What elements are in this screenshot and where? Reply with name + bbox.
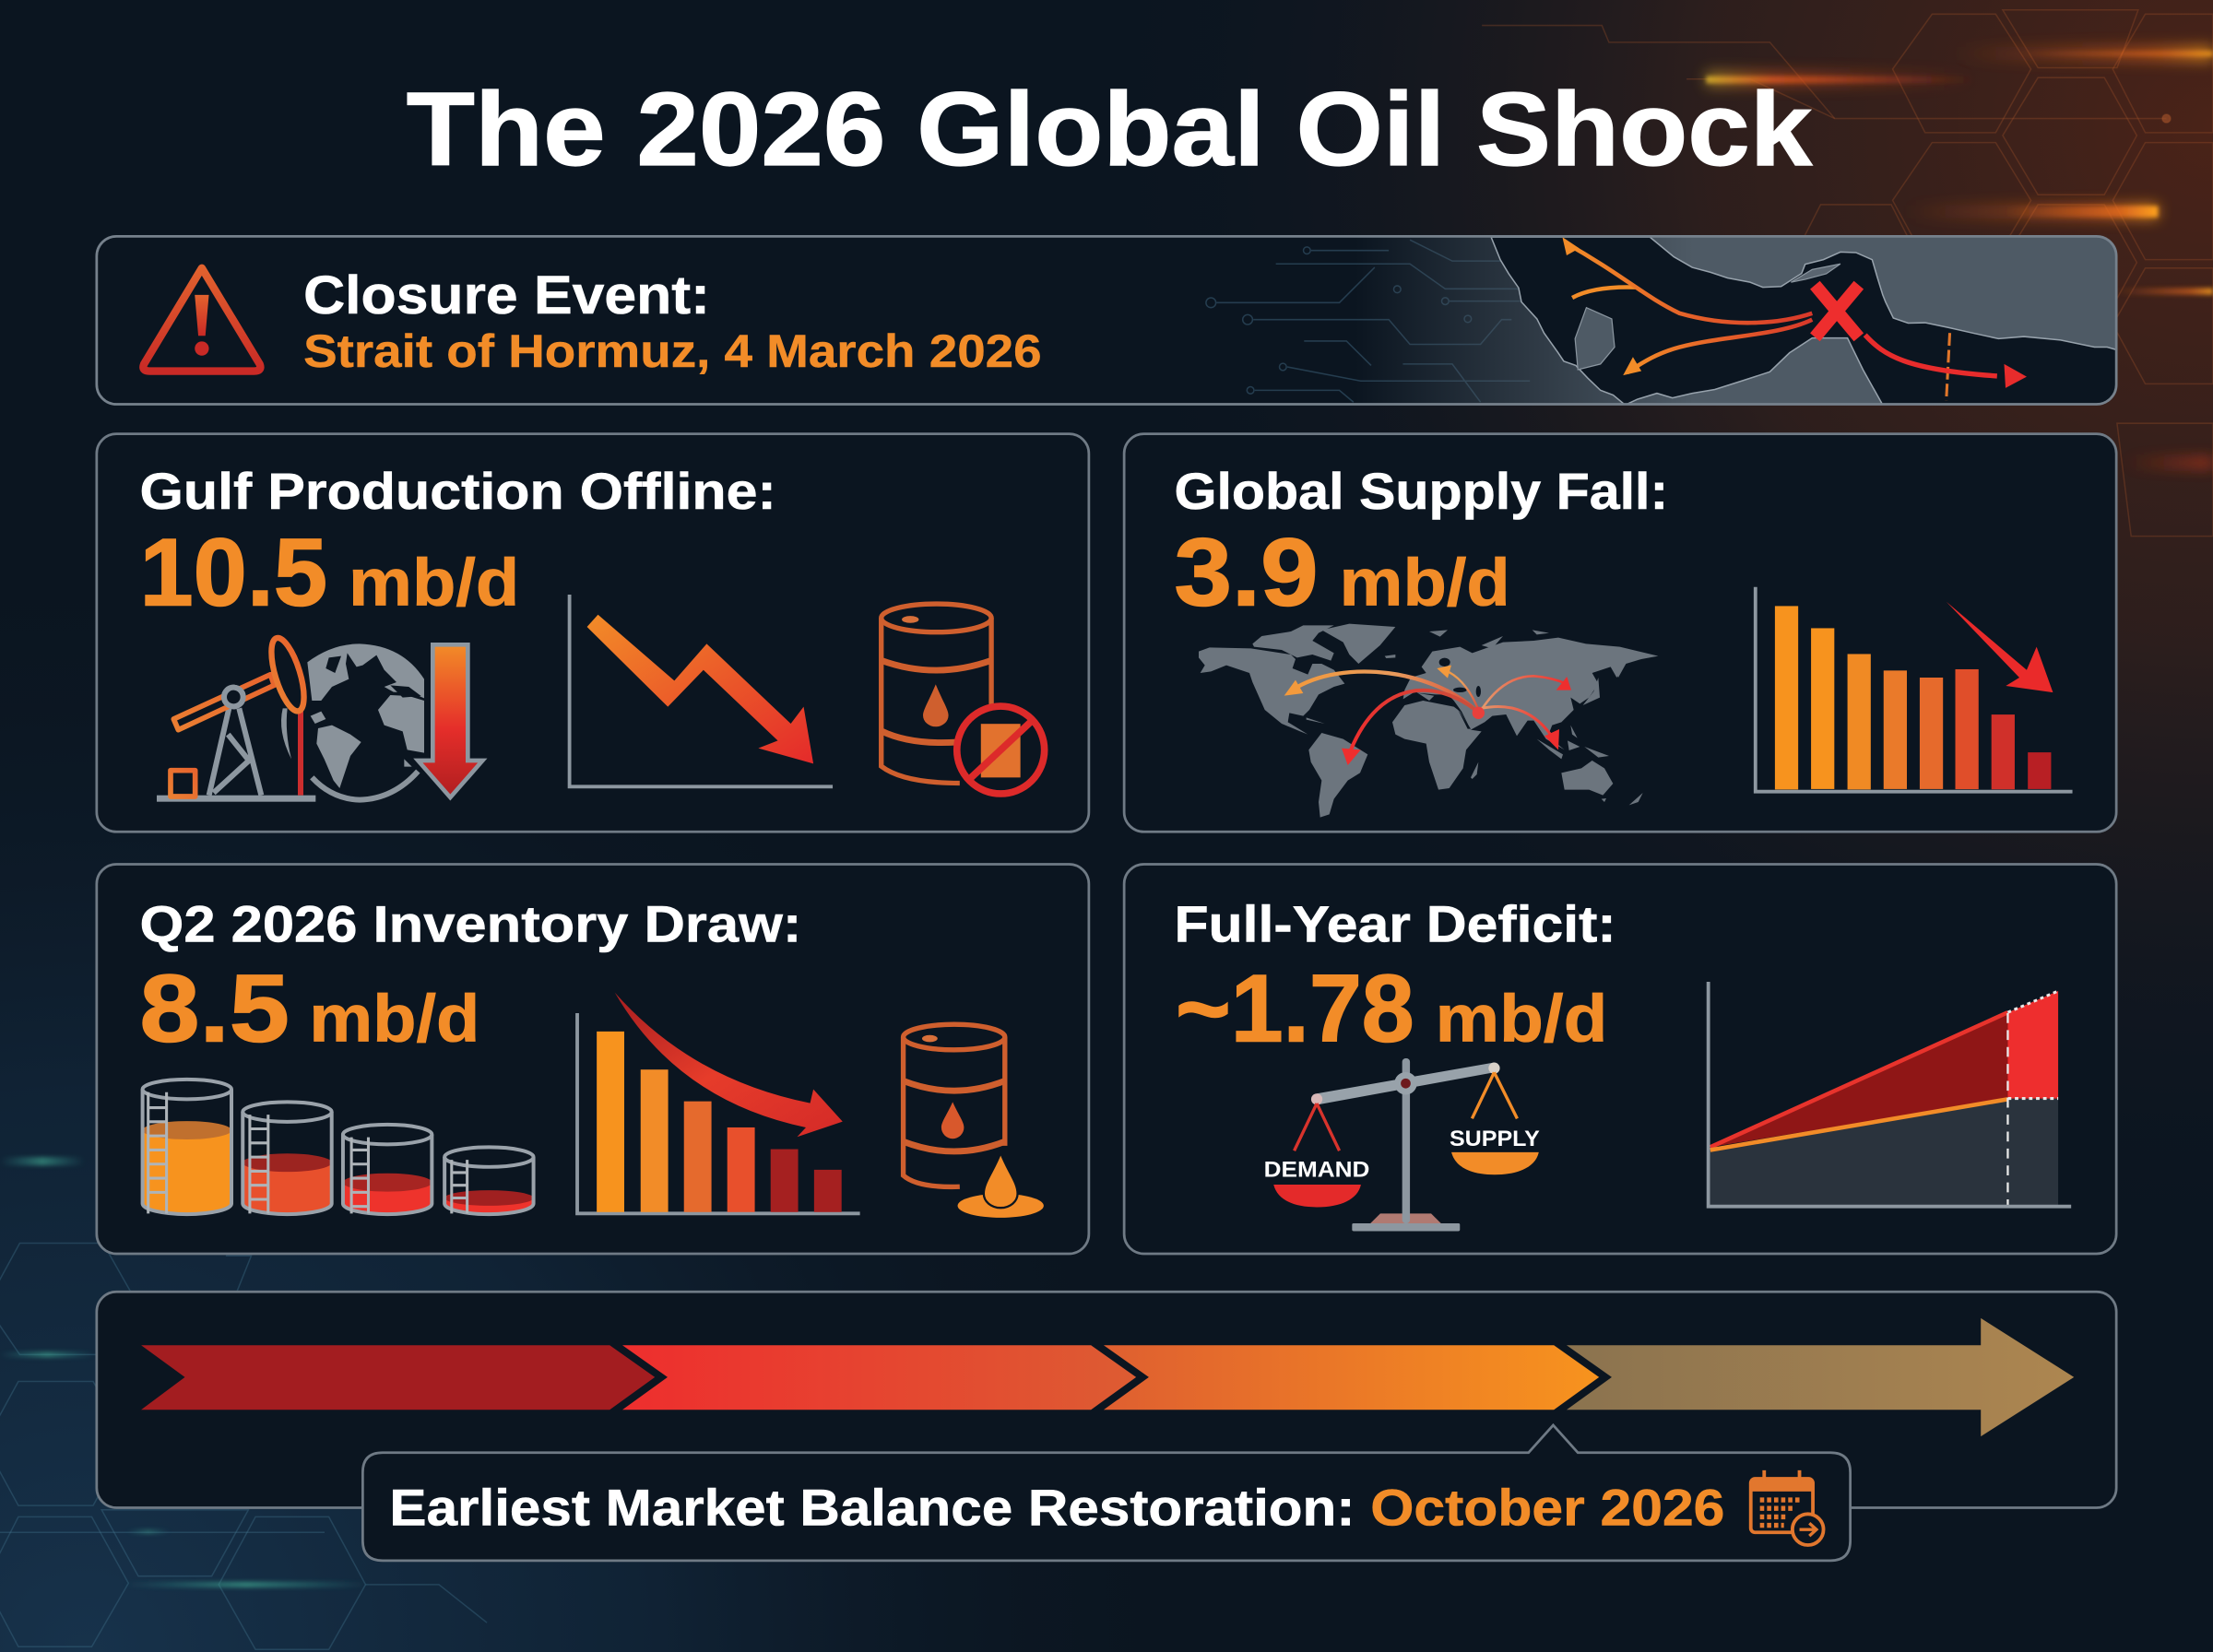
value: mb/d <box>1436 983 1607 1056</box>
panel: gulf production offline <box>97 434 1089 832</box>
value <box>1176 956 1607 1063</box>
map: Strait of Hormuz <box>1206 237 2117 405</box>
timeline arrow <box>141 1318 2074 1436</box>
icon: warning triangle <box>143 268 260 372</box>
value: mb/d <box>309 983 479 1056</box>
callout: market balance date <box>362 1425 1851 1561</box>
callout text: Earliest Market Balance Restoration: <box>389 1479 1355 1537</box>
arrow: declining trend <box>1947 602 2053 692</box>
heading: Q2 2026 Inventory Draw: <box>140 895 801 953</box>
heading: Full-Year Deficit: <box>1174 895 1616 953</box>
value: ~1.78 <box>1176 956 1414 1063</box>
panel: Q2 2026 inventory draw <box>97 865 1089 1254</box>
tank 3 <box>343 1125 432 1214</box>
value <box>140 956 479 1063</box>
globe <box>281 643 424 800</box>
panel: full-year deficit <box>1124 865 2116 1254</box>
icon: imbalanced scale <box>1264 1058 1540 1231</box>
icon: down arrow <box>418 644 482 797</box>
label: demand: DEMAND <box>1264 1158 1369 1183</box>
date line: Strait of Hormuz, 4 March 2026 <box>303 324 1042 377</box>
title: The 2026 Global Oil Shock <box>407 71 1813 188</box>
heading: Global Supply Fall: <box>1174 462 1668 520</box>
tank 4 <box>444 1147 534 1214</box>
value: 8.5 <box>140 956 290 1063</box>
heading: closure event: Closure Event: <box>303 266 710 325</box>
tank 1 <box>143 1080 231 1214</box>
label: supply: SUPPLY <box>1450 1127 1540 1151</box>
heading: Gulf Production Offline: <box>140 462 776 520</box>
line chart: falling production <box>570 595 833 786</box>
icon: pumpjack and globe <box>157 634 424 802</box>
bar chart: supply decline <box>1756 587 2073 792</box>
value: 10.5 <box>140 520 327 627</box>
callout date: October 2026 <box>1370 1479 1724 1537</box>
background hexagons and teal streaks, lower left <box>0 1157 487 1649</box>
background hexagons and energy streaks, upper right <box>1482 10 2213 537</box>
panel: closure event <box>97 236 2117 405</box>
panel: timeline <box>97 1292 2116 1561</box>
panel: global supply fall <box>1124 434 2116 832</box>
arrow: falling curve <box>615 993 843 1137</box>
icon: four storage tanks <box>143 1080 534 1214</box>
red X over the strait <box>1815 285 1859 337</box>
bar chart: inventory draw <box>577 993 860 1213</box>
value: 3.9 <box>1174 520 1319 627</box>
value: mb/d <box>1340 547 1510 620</box>
value <box>140 520 519 627</box>
tank 2 <box>243 1102 332 1214</box>
icon: barrel with no-entry sign <box>882 604 1045 794</box>
world map with flow arrows <box>1199 624 1658 818</box>
value <box>1174 520 1510 627</box>
value: mb/d <box>349 547 519 620</box>
icon: calendar <box>1751 1470 1824 1545</box>
area chart: supply and demand gap <box>1709 982 2071 1207</box>
icon: leaking barrel <box>904 1024 1044 1218</box>
